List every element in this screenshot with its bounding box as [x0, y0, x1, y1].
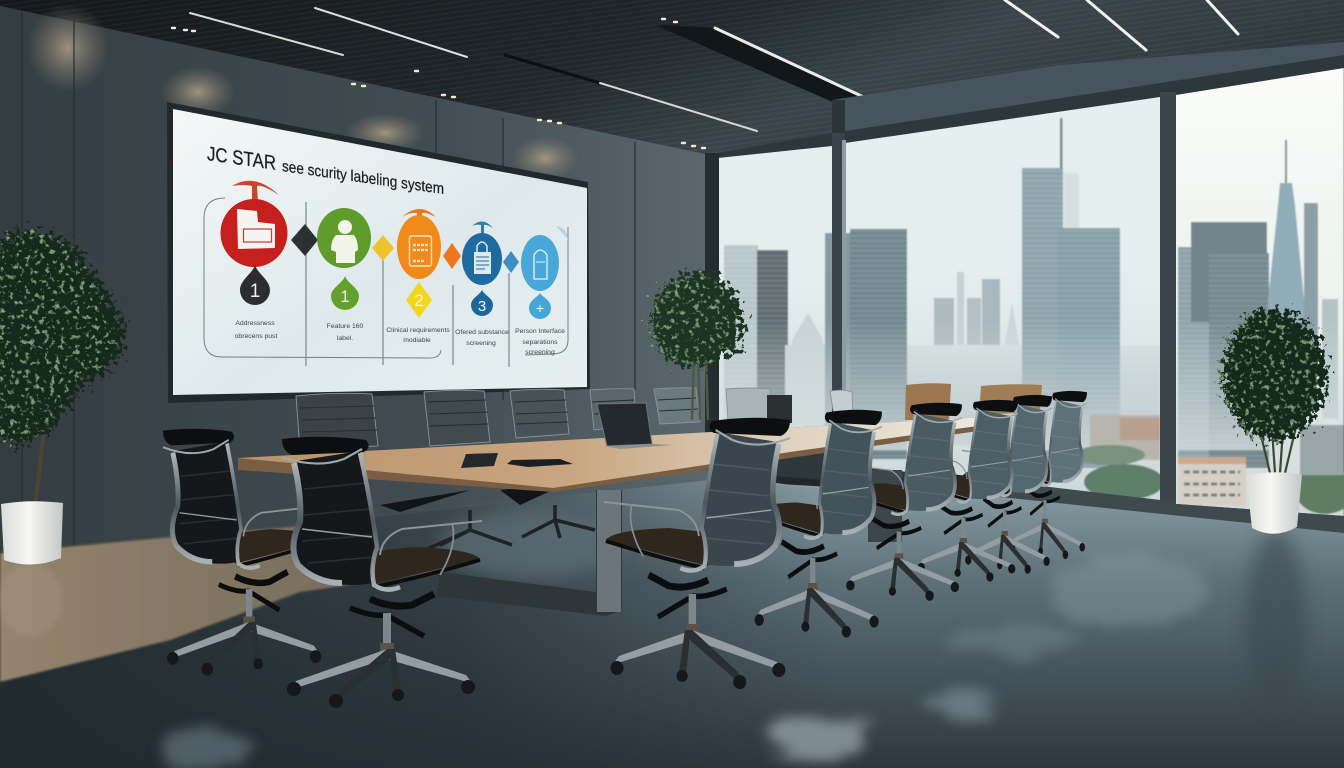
step captions: screening: [525, 349, 555, 356]
right pane towers: [1178, 140, 1318, 468]
screen title: see scurity labeling system: [282, 158, 444, 198]
screen title: [207, 143, 444, 198]
wall screen: [167, 102, 590, 403]
step captions: screening: [466, 340, 496, 347]
connector diamond orange: [443, 243, 461, 269]
ceiling lights: [172, 0, 1238, 148]
step captions: Addressness: [235, 320, 275, 327]
step 4: blue circle with lock icon: [462, 221, 502, 316]
step 3: orange circle with clipboard icon: 2: [414, 291, 424, 310]
chair left near: [282, 437, 482, 708]
step captions: modiable: [403, 337, 431, 344]
chair right 4: [842, 403, 962, 601]
back row chairs: [296, 383, 1042, 450]
chair right 5: [750, 410, 882, 638]
far laptop: [767, 395, 792, 423]
plant: right: [1222, 309, 1326, 473]
pot: left: [1, 501, 63, 565]
connector diamond dark: [291, 224, 318, 256]
step captions: label.: [337, 335, 353, 342]
screen title: JC STAR: [207, 143, 276, 175]
step captions: Person Interface: [515, 328, 565, 335]
chair far right 2: [962, 395, 1052, 574]
window view: city skyline: [718, 60, 1344, 520]
warm floor reflection: [0, 526, 450, 682]
step captions: Clinical requirements: [386, 327, 450, 334]
back wall: [0, 4, 710, 552]
step 5: light blue circle with device icon: +: [536, 300, 544, 316]
centre towers: [825, 118, 1120, 473]
step captions: obrecens pust: [235, 333, 277, 340]
plant: left: [0, 231, 125, 505]
step captions: Feature 160: [327, 323, 364, 330]
flow outline and dividers: [204, 198, 568, 367]
step 3: orange circle with clipboard icon: [397, 209, 441, 318]
connector diamond blue: [503, 251, 519, 273]
laptop: [597, 403, 673, 449]
chair left far: [163, 429, 327, 676]
chair right near: [604, 418, 790, 689]
window mullions: [705, 92, 1344, 534]
left pane towers: [724, 244, 826, 419]
under-table floor glow: [440, 511, 620, 579]
table legs and far-side chair bases: [380, 470, 902, 616]
step 1: red circle with folder icon: 1: [250, 281, 260, 302]
connector diamond yellow: [372, 235, 394, 261]
ceiling: [0, 0, 1344, 170]
step captions: Ofered substance: [455, 329, 509, 336]
plant: middle: [651, 271, 744, 420]
pot: right: [1246, 472, 1302, 534]
tablet on table: [461, 453, 498, 468]
step 4: blue circle with lock icon: 3: [478, 298, 486, 315]
floor: [0, 480, 1344, 768]
curved accent: [556, 226, 568, 240]
step 1: red circle with folder icon: [220, 181, 288, 305]
step 5: light blue circle with device icon: [521, 235, 559, 319]
step 2: green circle with person icon: [317, 208, 371, 310]
low-rise buildings and trees: [1075, 415, 1344, 514]
step captions: separations: [522, 339, 558, 346]
chairs near side: [163, 391, 1087, 708]
floor reflections: [159, 554, 1210, 768]
chair far right 1: [1007, 391, 1087, 559]
distant towers: [792, 272, 1338, 445]
chair far right 3: [914, 400, 1018, 582]
window wall frame: [705, 42, 1344, 535]
step 2: green circle with person icon: 1: [340, 287, 350, 306]
conference table: [238, 395, 985, 492]
step captions: [235, 320, 565, 356]
notepad on table: [507, 459, 573, 467]
